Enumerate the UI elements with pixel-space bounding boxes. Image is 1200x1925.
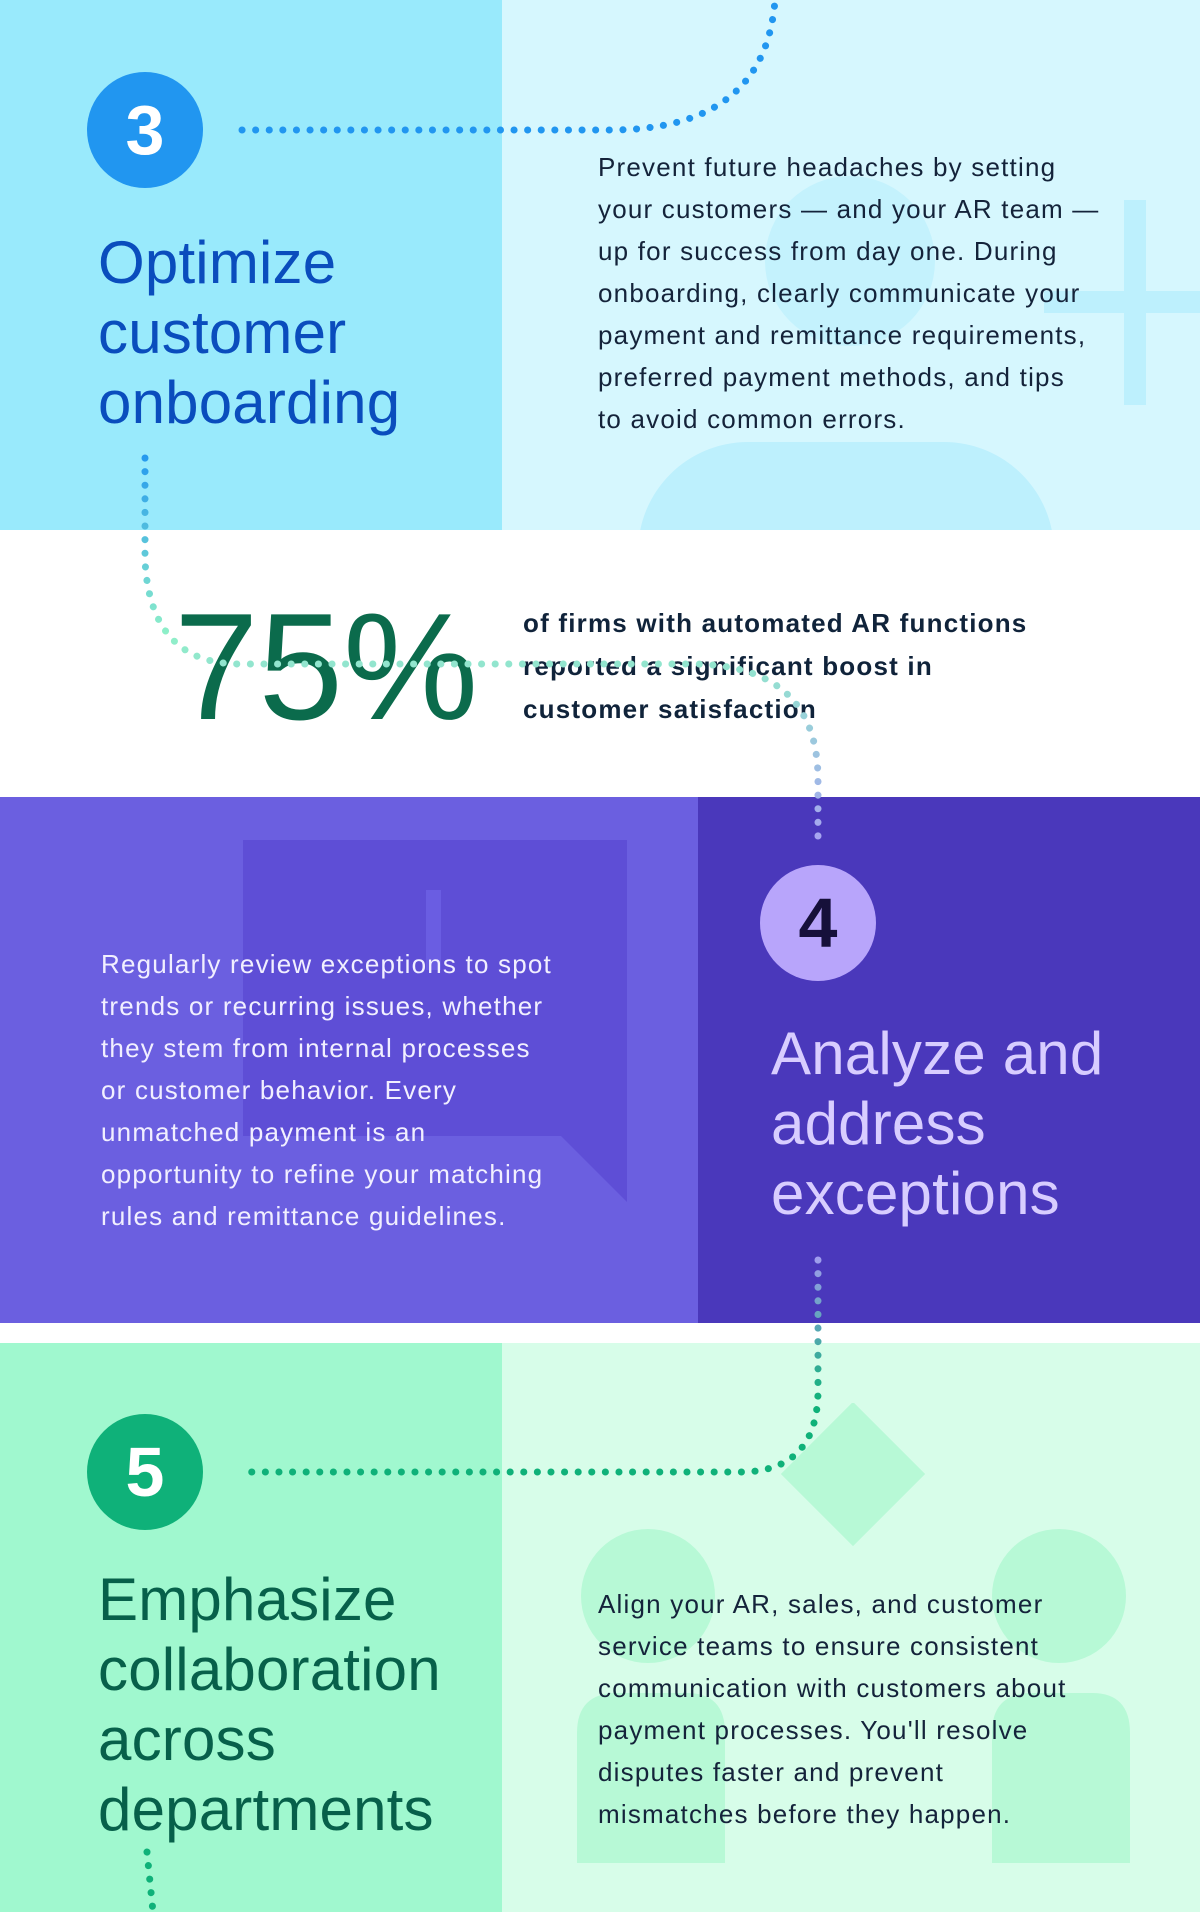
text block: onboarding: to avoid common errors.: [598, 404, 906, 434]
heading: emphasize collaboration: Emphasize: [98, 1566, 397, 1633]
text block: collaboration: disputes faster and prevent: [598, 1757, 944, 1787]
text block: collaboration: communication with customers about: [598, 1673, 1067, 1703]
text block: collaboration: [598, 1589, 1067, 1829]
text block: exceptions: unmatched payment is an: [101, 1117, 426, 1147]
number badge 4: [760, 865, 876, 981]
stat text: of firms with automated AR functions: [523, 608, 1027, 638]
text block: onboarding: Prevent future headaches by setting: [598, 152, 1056, 182]
text block: onboarding: [598, 152, 1100, 434]
stat text: customer satisfaction: [523, 694, 817, 724]
heading: optimize customer onboarding: onboarding: [98, 369, 400, 436]
heading: analyze and address exceptions: address: [771, 1090, 986, 1157]
heading: emphasize collaboration: departments: [98, 1776, 434, 1843]
heading: emphasize collaboration: [98, 1566, 441, 1843]
heading: optimize customer onboarding: [98, 229, 400, 436]
text block: onboarding: payment and remittance requirements,: [598, 320, 1086, 350]
heading: optimize customer onboarding: customer: [98, 299, 346, 366]
stat text: reported a significant boost in: [523, 651, 933, 681]
heading: optimize customer onboarding: Optimize: [98, 229, 336, 296]
icon: person and plus: [640, 176, 1200, 530]
heading: emphasize collaboration: collaboration: [98, 1636, 441, 1703]
stat text: [523, 608, 1027, 724]
heading: emphasize collaboration: across: [98, 1706, 276, 1773]
text block: exceptions: or customer behavior. Every: [101, 1075, 457, 1105]
number badge 5: 5: [126, 1433, 164, 1511]
left colour block: [0, 1343, 502, 1912]
heading: analyze and address exceptions: Analyze and: [771, 1020, 1103, 1087]
number badge 3: [87, 72, 203, 188]
heading: analyze and address exceptions: [771, 1020, 1103, 1227]
heading: analyze and address exceptions: exceptions: [771, 1160, 1060, 1227]
number badge 4: 4: [799, 884, 837, 962]
text block: collaboration: payment processes. You'll resolve: [598, 1715, 1028, 1745]
text block: collaboration: mismatches before they happen.: [598, 1799, 1011, 1829]
text block: collaboration: service teams to ensure consistent: [598, 1631, 1039, 1661]
text block: exceptions: they stem from internal processes: [101, 1033, 531, 1063]
icon: speech bubble with exclamation: [243, 840, 627, 1202]
text block: exceptions: [101, 949, 552, 1231]
text block: onboarding: onboarding, clearly communicate your: [598, 278, 1081, 308]
number badge 5: [87, 1414, 203, 1530]
text block: onboarding: up for success from day one. During: [598, 236, 1058, 266]
text block: exceptions: rules and remittance guidelines.: [101, 1201, 506, 1231]
text block: exceptions: trends or recurring issues, whether: [101, 991, 543, 1021]
text block: onboarding: preferred payment methods, and tips: [598, 362, 1065, 392]
text block: onboarding: your customers — and your AR team —: [598, 194, 1100, 224]
panel: section 4: [0, 797, 1200, 1323]
left colour block: [0, 797, 698, 1323]
text block: exceptions: Regularly review exceptions to spot: [101, 949, 552, 979]
panel: statistic: [0, 530, 1200, 797]
left colour block: [0, 0, 502, 530]
icon: two people and diamond: [577, 1403, 1130, 1863]
panel: section 3: [0, 0, 1200, 530]
stat number: 75%: [174, 582, 478, 752]
text block: exceptions: opportunity to refine your matching: [101, 1159, 543, 1189]
panel: section 5: [0, 1343, 1200, 1912]
number badge 3: 3: [126, 91, 164, 169]
text block: collaboration: Align your AR, sales, and customer: [598, 1589, 1043, 1619]
